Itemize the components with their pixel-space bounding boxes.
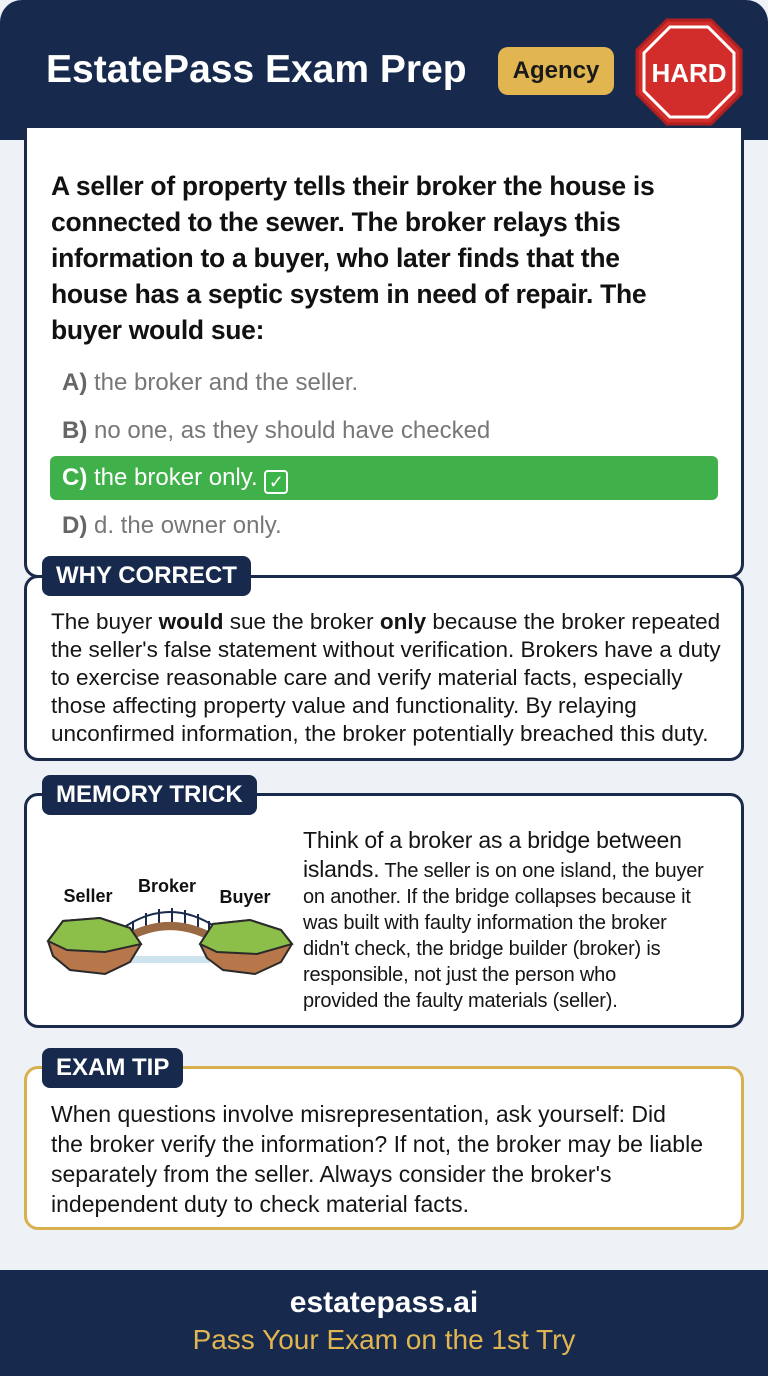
panel: exam tip	[24, 1066, 744, 1230]
option B: B) no one, as they should have checked	[62, 417, 490, 444]
heading: exam tip: EXAM TIP	[56, 1054, 169, 1081]
memory trick text: on another. If the bridge collapses because it	[303, 886, 691, 908]
illustration: bridge between islands: Broker	[138, 876, 196, 896]
badge: Agency	[498, 47, 614, 95]
heading: memory trick: MEMORY TRICK	[56, 781, 243, 808]
memory trick text: was built with faulty information the broker	[303, 912, 667, 934]
heading: exam tip	[42, 1048, 183, 1088]
option C correct	[50, 456, 718, 500]
exam tip text: independent duty to check material facts.	[51, 1191, 469, 1217]
option C correct: ✓	[269, 472, 284, 492]
panel: why correct	[24, 575, 744, 761]
exam tip text	[51, 1101, 703, 1217]
memory trick text: didn't check, the bridge builder (broker) is	[303, 938, 660, 960]
footer tagline: Pass Your Exam on the 1st Try	[193, 1324, 575, 1355]
panel: memory trick	[24, 793, 744, 1028]
panel: question	[24, 128, 744, 578]
memory trick text: islands. The seller is on one island, the buyer	[303, 856, 704, 882]
exam tip text: separately from the seller. Always consider the broker's	[51, 1161, 611, 1187]
footer	[0, 1270, 768, 1376]
illustration: bridge between islands: Buyer	[219, 887, 271, 907]
question text: A seller of property tells their broker the house is connected to the sewer. The broker relays this information to a buyer, who later finds that the house has a septic system in need of repair. The buyer would sue:	[51, 171, 654, 345]
footer url: estatepass.ai	[290, 1286, 478, 1319]
memory trick text	[303, 827, 704, 1012]
badge: Agency: Agency	[513, 57, 599, 84]
header	[0, 0, 768, 140]
exam tip text: When questions involve misrepresentation, ask yourself: Did	[51, 1101, 666, 1127]
memory trick text: provided the faulty materials (seller).	[303, 990, 618, 1012]
heading: why correct: WHY CORRECT	[56, 562, 237, 589]
memory trick text: Think of a broker as a bridge between	[303, 827, 682, 853]
illustration: bridge between islands: Seller	[63, 886, 113, 906]
icon: HARD stop sign: HARD	[651, 58, 727, 88]
title: EstatePass Exam Prep	[46, 48, 467, 91]
icon: HARD stop sign	[636, 18, 742, 126]
illustration: bridge between islands	[46, 876, 294, 975]
option A: A) the broker and the seller.	[62, 369, 358, 396]
option D: D) d. the owner only.	[62, 512, 282, 539]
memory trick text: responsible, not just the person who	[303, 964, 616, 986]
explanation text: The buyer would sue the broker only because the broker repeated the seller's false statement without verification. Brokers have a duty to exercise reasonable care and verify material facts, especially those affecting property value and functionality. By relaying unconfirmed information, the broker potentially breached this duty.	[51, 609, 721, 746]
option C correct: C) the broker only.	[62, 464, 258, 491]
heading: why correct	[42, 556, 251, 596]
exam tip text: the broker verify the information? If not, the broker may be liable	[51, 1131, 703, 1157]
heading: memory trick	[42, 775, 257, 815]
